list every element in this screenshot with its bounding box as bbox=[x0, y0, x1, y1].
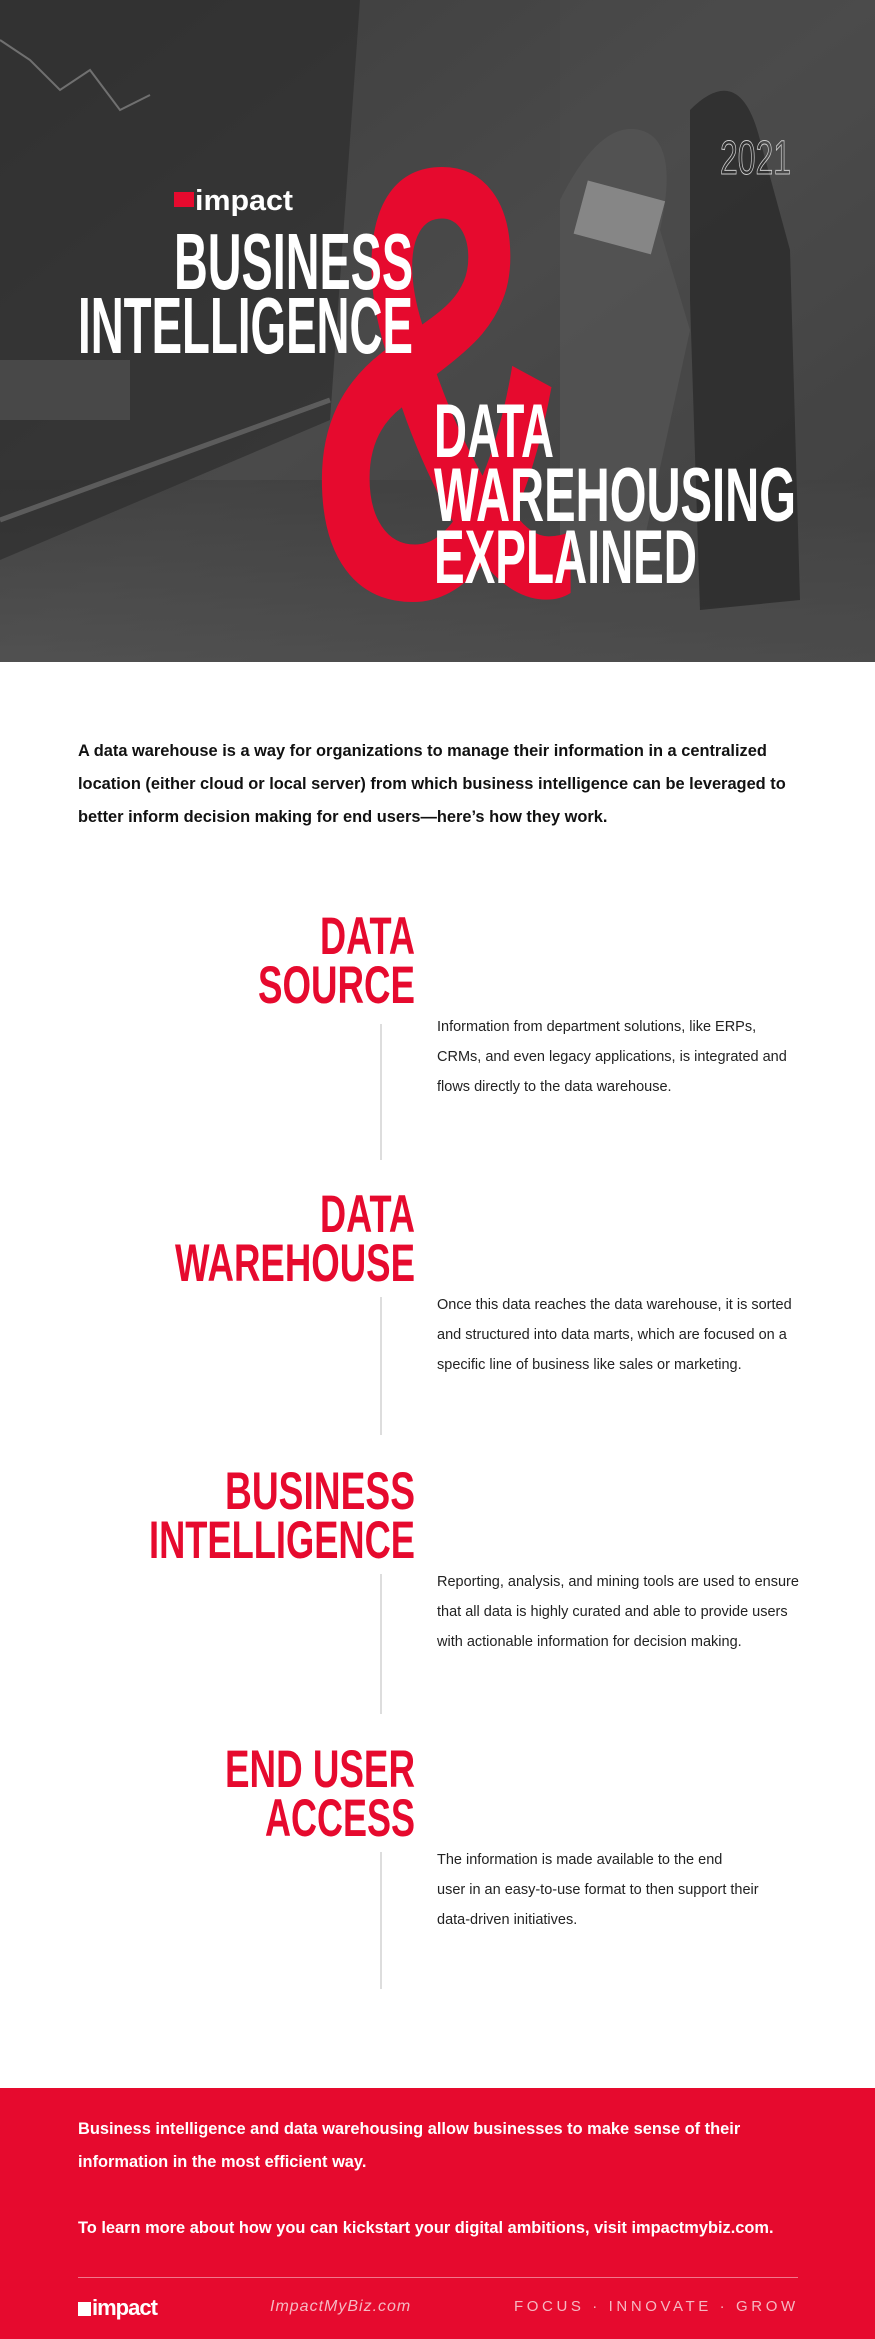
description: data-driven initiatives. bbox=[437, 1912, 577, 1928]
title left: INTELLIGENCE bbox=[78, 281, 413, 370]
heading bbox=[258, 907, 415, 1010]
description: and structured into data marts, which are focused on a bbox=[437, 1327, 787, 1343]
section: data source bbox=[258, 907, 787, 1160]
footer text: information in the most efficient way. bbox=[78, 2153, 366, 2171]
description bbox=[437, 1019, 787, 1095]
header hero bbox=[0, 0, 875, 662]
heading bbox=[149, 1462, 415, 1565]
footer text: Business intelligence and data warehousing allow businesses to make sense of their bbox=[78, 2120, 740, 2138]
title left bbox=[78, 217, 413, 370]
description: The information is made available to the end bbox=[437, 1852, 722, 1868]
title left: BUSINESS bbox=[174, 217, 413, 306]
title right: DATA bbox=[434, 389, 554, 474]
description bbox=[437, 1852, 759, 1928]
description bbox=[437, 1574, 799, 1650]
footer text: To learn more about how you can kickstart your digital ambitions, visit impactmybiz.com. bbox=[78, 2219, 774, 2237]
section: data warehouse bbox=[175, 1185, 792, 1435]
description: that all data is highly curated and able to provide users bbox=[437, 1604, 788, 1620]
footer panel bbox=[0, 2088, 875, 2339]
logo: impact bbox=[195, 185, 293, 217]
description: flows directly to the data warehouse. bbox=[437, 1079, 672, 1095]
description: specific line of business like sales or marketing. bbox=[437, 1357, 742, 1373]
footer logo: impact bbox=[92, 2295, 157, 2320]
description: with actionable information for decision making. bbox=[437, 1634, 742, 1650]
footer url: ImpactMyBiz.com bbox=[270, 2298, 411, 2315]
heading bbox=[225, 1740, 415, 1843]
title right: EXPLAINED bbox=[434, 515, 697, 600]
description bbox=[437, 1297, 792, 1373]
intro text: better inform decision making for end users—here’s how they work. bbox=[78, 808, 607, 826]
section: business intelligence bbox=[149, 1462, 799, 1714]
description: Reporting, analysis, and mining tools are used to ensure bbox=[437, 1574, 799, 1590]
description: user in an easy-to-use format to then support their bbox=[437, 1882, 759, 1898]
year 2021: 2021 bbox=[720, 132, 791, 185]
heading bbox=[175, 1185, 415, 1288]
description: Once this data reaches the data warehouse, it is sorted bbox=[437, 1297, 792, 1313]
description: Information from department solutions, like ERPs, bbox=[437, 1019, 756, 1035]
footer text bbox=[78, 2120, 774, 2237]
intro text: A data warehouse is a way for organizations to manage their information in a centralized bbox=[78, 742, 767, 760]
description: CRMs, and even legacy applications, is integrated and bbox=[437, 1049, 787, 1065]
section: end user access bbox=[225, 1740, 759, 1989]
title right bbox=[434, 389, 796, 600]
intro text bbox=[78, 742, 786, 826]
intro text: location (either cloud or local server) from which business intelligence can be leveraged to bbox=[78, 775, 786, 793]
footer tagline: FOCUS · INNOVATE · GROW bbox=[514, 2298, 799, 2315]
